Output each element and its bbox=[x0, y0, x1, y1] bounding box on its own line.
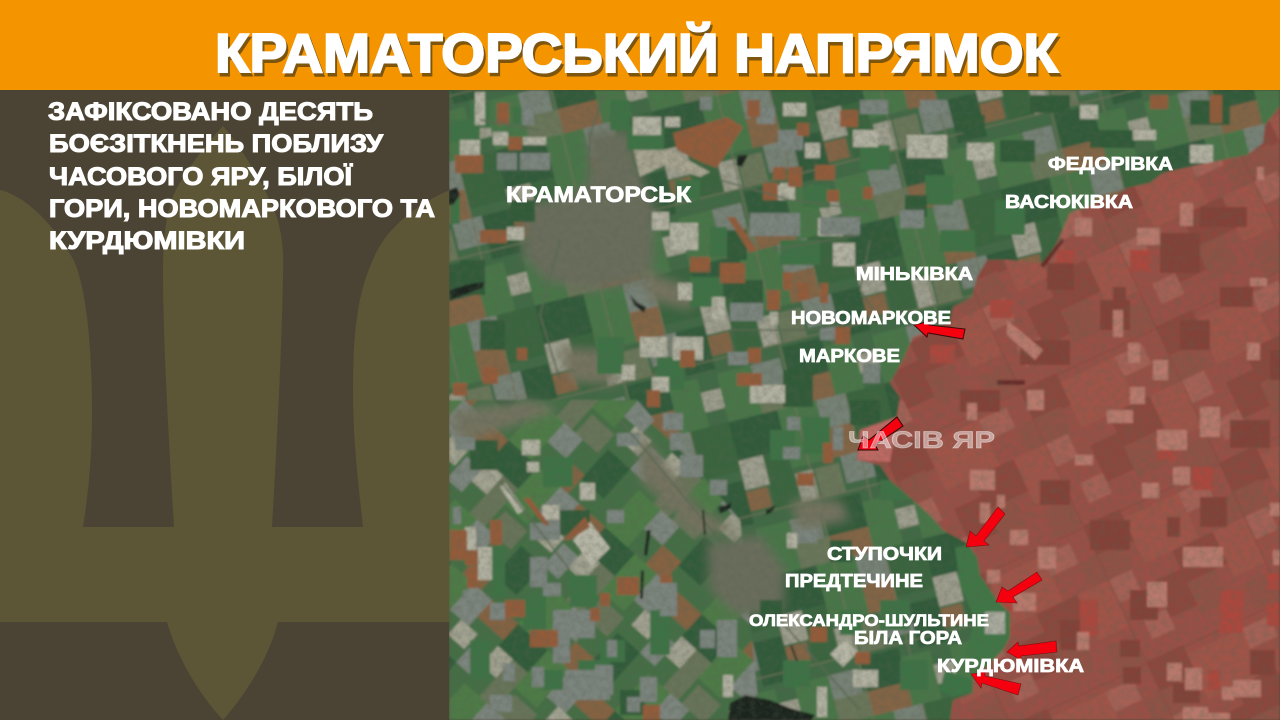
arrow: Предтечине bbox=[996, 572, 1042, 603]
header band bbox=[0, 0, 1280, 90]
icon: trident watermark bbox=[0, 126, 450, 720]
ponds and reservoir bbox=[449, 155, 815, 720]
title: КРАМАТОРСЬКИЙ НАПРЯМОК bbox=[215, 21, 1058, 84]
arrow: Новомаркове bbox=[914, 321, 965, 339]
arrow: Курдюмівка bbox=[971, 672, 1021, 695]
text block: summary: ЧАСОВОГО ЯРУ, БІЛОЇ bbox=[49, 163, 353, 191]
text block: summary: ГОРИ, НОВОМАРКОВОГО ТА bbox=[49, 195, 435, 223]
label: Ступочки: СТУПОЧКИ bbox=[827, 544, 942, 564]
label: Курдюмівка: КУРДЮМІВКА bbox=[937, 656, 1084, 676]
red occupied zone bbox=[850, 100, 1280, 720]
green strip at front bbox=[955, 545, 1010, 668]
text block: summary: ЗАФІКСОВАНО ДЕСЯТЬ bbox=[48, 98, 373, 126]
text block: summary bbox=[48, 98, 435, 255]
label: Васюківка: ВАСЮКІВКА bbox=[1005, 192, 1133, 212]
arrow: Ступочки bbox=[966, 507, 1005, 547]
arrow: Часів Яр bbox=[858, 417, 903, 450]
label: Міньківка: МІНЬКІВКА bbox=[856, 264, 973, 284]
label: Краматорськ: КРАМАТОРСЬК bbox=[506, 182, 692, 207]
label: Новомаркове: НОВОМАРКОВЕ bbox=[791, 308, 951, 328]
dark green fields bbox=[460, 95, 1230, 715]
bright green fields bbox=[450, 100, 1025, 690]
arrow: Біла Гора bbox=[1007, 641, 1057, 660]
panel: left sidebar bbox=[0, 90, 450, 720]
text block: summary: КУРДЮМІВКИ bbox=[49, 227, 245, 255]
label: Біла Гора: БІЛА ГОРА bbox=[854, 628, 962, 648]
label: Олександро-Шультине: ОЛЕКСАНДРО-ШУЛЬТИНЕ bbox=[749, 611, 989, 630]
panel: satellite map bbox=[449, 90, 1280, 720]
label: Предтечине: ПРЕДТЕЧИНЕ bbox=[785, 571, 923, 591]
label: Часів Яр: ЧАСІВ ЯР bbox=[848, 427, 995, 454]
label: Маркове: МАРКОВЕ bbox=[799, 346, 900, 366]
brown fields bbox=[450, 95, 1222, 720]
pale fields bbox=[460, 92, 1213, 717]
grey fields bbox=[453, 97, 944, 712]
red zone: pale patches bbox=[967, 167, 1280, 720]
label: Федорівка: ФЕДОРІВКА bbox=[1048, 154, 1173, 174]
red zone: bright patches bbox=[930, 250, 1280, 690]
red zone: dark patches bbox=[960, 207, 1280, 703]
text block: summary: БОЄЗІТКНЕНЬ ПОБЛИЗУ bbox=[49, 130, 383, 158]
rivers and roads bbox=[480, 92, 880, 710]
